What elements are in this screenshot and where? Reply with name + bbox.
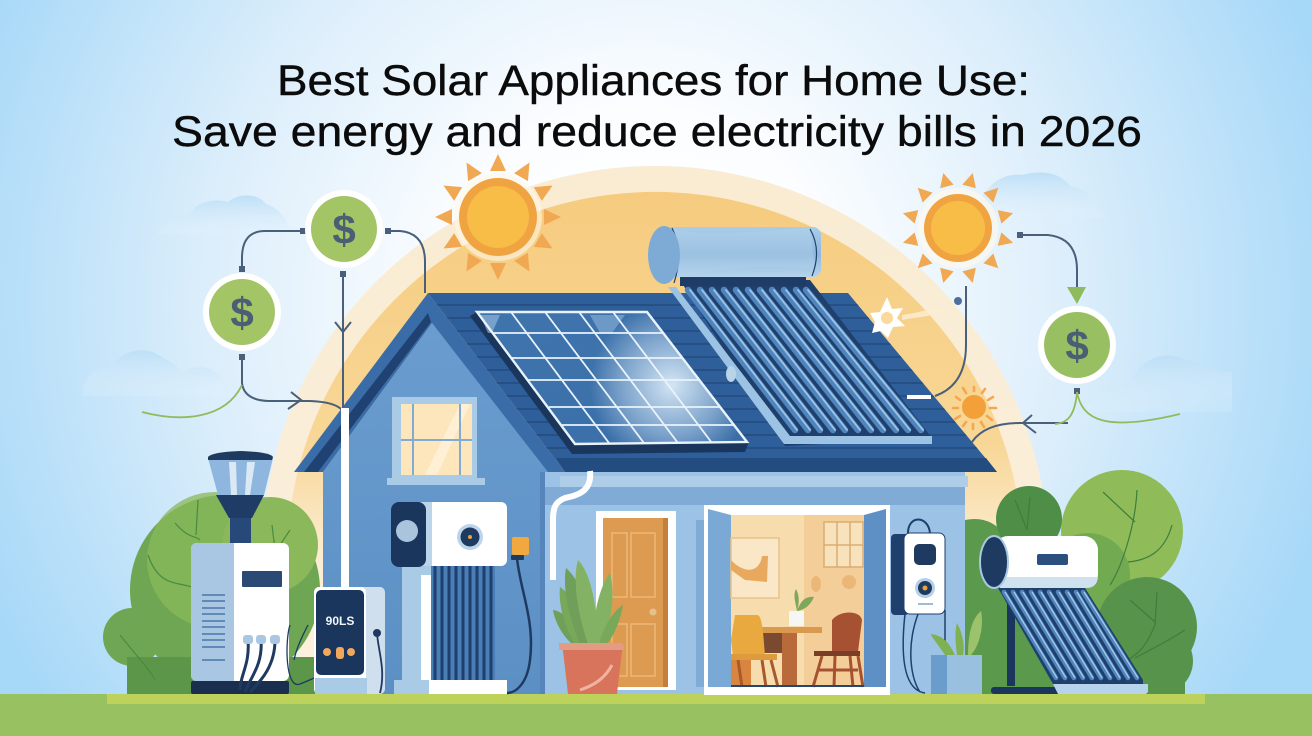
kiosk display reading: 90LS bbox=[326, 614, 354, 628]
dollar badge: top bbox=[305, 190, 383, 268]
title: Best Solar Appliances for Home Use: bbox=[277, 57, 1030, 105]
arrowhead: into dollar bbox=[1067, 287, 1086, 304]
potted plant bbox=[553, 560, 624, 694]
dollar badge: left bbox=[203, 273, 281, 351]
roof bbox=[294, 293, 1000, 472]
dollar badge: right bbox=[1038, 306, 1116, 384]
open patio view bbox=[704, 505, 890, 695]
cloud: upper left bbox=[155, 195, 293, 235]
wires and arrows: left bbox=[239, 228, 425, 590]
bushes: right bbox=[965, 470, 1197, 694]
cloud: lower right bbox=[1085, 356, 1232, 412]
solar panel bbox=[470, 312, 749, 454]
title: Save energy and reduce electricity bills in 2026 bbox=[172, 108, 1142, 156]
solar lamp bbox=[208, 451, 273, 545]
sun: right bbox=[901, 171, 1015, 285]
downspout bbox=[553, 471, 590, 580]
dollar badge: left: $ bbox=[230, 289, 254, 336]
house walls bbox=[323, 323, 968, 694]
wall AC unit with radiator bbox=[391, 502, 531, 694]
sun: left bbox=[435, 154, 561, 280]
cloud: upper right bbox=[975, 173, 1106, 218]
dollar badge: right: $ bbox=[1065, 322, 1089, 369]
green wire: right bbox=[1055, 392, 1180, 424]
attic window bbox=[387, 397, 485, 485]
ground bbox=[0, 694, 1312, 736]
bushes: left bbox=[103, 492, 330, 694]
battery inverter unit bbox=[191, 543, 314, 694]
sun: small on arch bbox=[953, 387, 996, 429]
green wire: left bbox=[142, 385, 242, 417]
wires and arrows: right bbox=[907, 232, 1080, 442]
solar water heater on roof bbox=[648, 226, 932, 446]
solar water heater stand-alone bbox=[980, 536, 1148, 694]
icon: sun flare on roof bbox=[870, 297, 950, 338]
EV charger wall unit bbox=[891, 520, 945, 693]
door bbox=[596, 511, 676, 690]
cloud: lower left bbox=[82, 350, 236, 396]
monitor kiosk bbox=[314, 587, 385, 694]
sun glow arch bbox=[261, 166, 1049, 694]
wall conduit bbox=[341, 408, 349, 588]
title bbox=[172, 57, 1142, 156]
dollar badge: top: $ bbox=[332, 206, 356, 253]
small potted plant bbox=[931, 611, 982, 694]
